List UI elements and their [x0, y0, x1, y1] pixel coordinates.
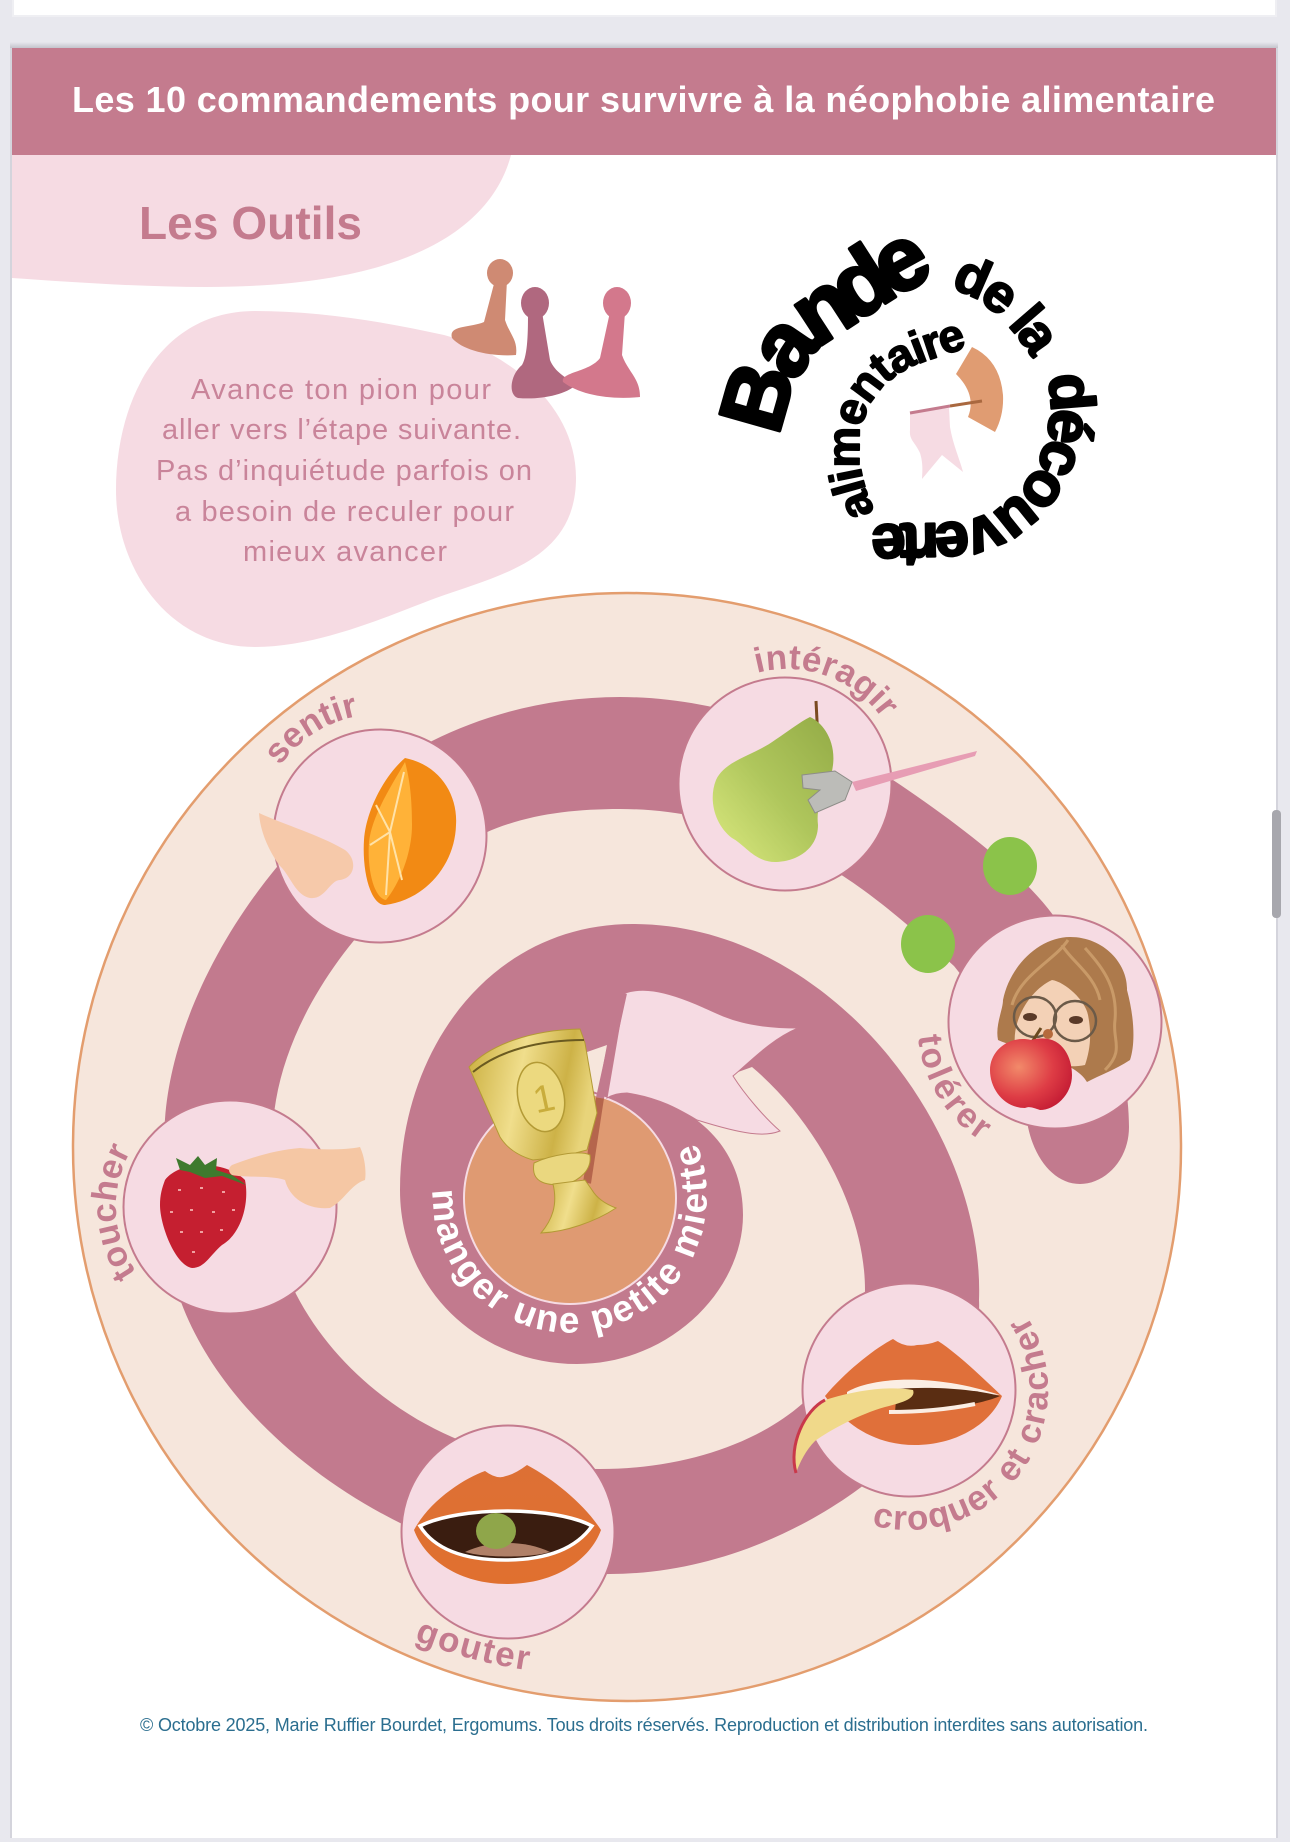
- logo word: alimentaire: alimentaire: [828, 326, 965, 518]
- icon: game pawns: [452, 259, 640, 398]
- icon: face with apple: [990, 937, 1133, 1110]
- logo word: Bande: Bande: [718, 239, 930, 432]
- instructions text: a besoin de reculer pour: [175, 496, 514, 528]
- blob: heading background: [12, 155, 511, 287]
- instructions text: [156, 374, 532, 568]
- scrollbar: [1272, 810, 1281, 918]
- label: toucher: [90, 1142, 134, 1282]
- icon: strawberry: [160, 1156, 246, 1268]
- label: sentir: [268, 696, 354, 762]
- title banner: [12, 48, 1276, 155]
- blob: text background: [116, 311, 576, 647]
- icon: open mouth with pea: [414, 1465, 601, 1584]
- green tokens: [901, 837, 1037, 973]
- logo: bande de la découverte alimentaire: [718, 239, 1098, 566]
- instructions text: aller vers l’étape suivante.: [162, 414, 521, 446]
- pawn orange: [452, 259, 516, 355]
- pawn mauve: [512, 287, 576, 398]
- step: toucher: [90, 1102, 366, 1312]
- step: gouter: [400, 1424, 614, 1670]
- label: croquer et cracher: [874, 1320, 1048, 1532]
- game board: [72, 592, 1182, 1702]
- footer copyright: © Octobre 2025, Marie Ruffier Bourdet, Ergomums. Tous droits réservés. Reproduction et distribution interdites sans autorisation.: [140, 1715, 1148, 1735]
- logo words: de la: de la: [955, 258, 1052, 360]
- step: croquer et cracher: [792, 1284, 1048, 1532]
- icon: pear and fork: [713, 701, 977, 862]
- panel: les outils: [12, 155, 511, 287]
- instructions text: mieux avancer: [243, 536, 447, 568]
- logo word: découverte: découverte: [872, 374, 1098, 566]
- step: intéragir: [680, 646, 977, 892]
- spiral path: [163, 697, 1129, 1574]
- instructions text: Pas d’inquiétude parfois on: [156, 455, 532, 487]
- flag: [587, 990, 798, 1183]
- finish circle: [464, 1092, 676, 1304]
- icon: nose: [259, 813, 353, 898]
- label: intéragir: [754, 646, 897, 714]
- heading: Les Outils: [139, 197, 362, 249]
- step: tolérer: [918, 914, 1162, 1137]
- icon: trophy: 1: [529, 1077, 559, 1122]
- icon: orange slice: [364, 758, 456, 905]
- step: sentir: [259, 696, 488, 944]
- icon: mouth with apple slice: [794, 1339, 1002, 1473]
- previous card: [13, 0, 1276, 16]
- title: Les 10 commandements pour survivre à la néophobie alimentaire: [72, 79, 1215, 120]
- logo fan: [956, 347, 1003, 432]
- icon: trophy: [469, 1029, 616, 1233]
- board disc: [73, 593, 1181, 1701]
- label: gouter: [415, 1624, 530, 1670]
- icon: finger: [229, 1147, 365, 1208]
- panel: instructions: [116, 311, 576, 647]
- label: manger une petite miette: manger une petite miette: [432, 1146, 707, 1338]
- pawn pink: [563, 287, 640, 398]
- cream spot behind trophy: [587, 1045, 607, 1093]
- instructions text: Avance ton pion pour: [191, 374, 491, 406]
- logo flag: [910, 401, 982, 479]
- label: tolérer: [918, 1034, 991, 1137]
